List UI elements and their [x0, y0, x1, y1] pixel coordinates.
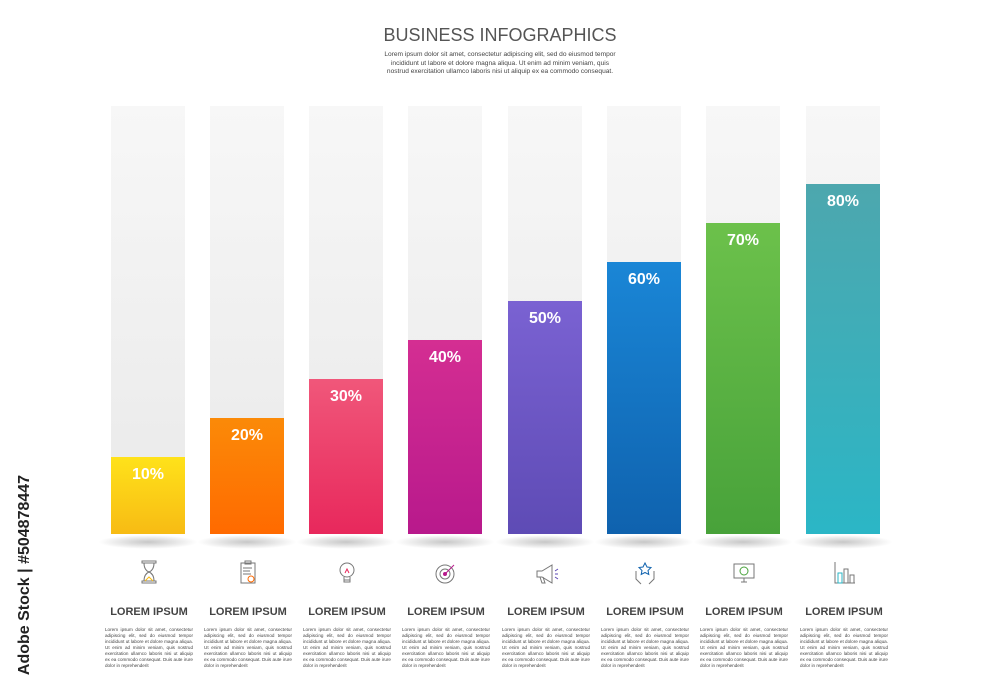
subtitle text: nostrud exercitation ullamco laboris nisi ut aliquip ex ea commodo consequat.	[387, 68, 613, 75]
bar 30%: 30%	[330, 388, 362, 405]
column 1	[105, 560, 193, 668]
column 4: Lorem ipsum dolor sit amet, consectetur adipiscing elit, sed do eiusmod tempor incididunt ut labore et dolore magna aliqua. Ut enim ad minim veniam, quis nostrud exercitation ullamco laboris nisi ut aliquip ex ea commodo consequat. Duis aute irure dolor in reprehenderit	[402, 627, 490, 668]
column 2: Lorem ipsum dolor sit amet, consectetur adipiscing elit, sed do eiusmod tempor incididunt ut labore et dolore magna aliqua. Ut enim ad minim veniam, quis nostrud exercitation ullamco laboris nisi ut aliquip ex ea commodo consequat. Duis aute irure dolor in reprehenderit	[204, 627, 292, 668]
icon: monitor with dollar	[734, 564, 754, 582]
column 4	[402, 564, 490, 668]
column 4: LOREM IPSUM	[407, 606, 485, 618]
column 5: Lorem ipsum dolor sit amet, consectetur adipiscing elit, sed do eiusmod tempor incididunt ut labore et dolore magna aliqua. Ut enim ad minim veniam, quis nostrud exercitation ullamco laboris nisi ut aliquip ex ea commodo consequat. Duis aute irure dolor in reprehenderit	[502, 627, 590, 668]
title: BUSINESS INFOGRAPHICS	[383, 25, 617, 45]
column 8	[800, 562, 888, 668]
bar 40%	[408, 106, 482, 534]
column 3	[303, 562, 391, 668]
icon: light bulb	[340, 562, 354, 582]
bar 40%: 40%	[429, 349, 461, 366]
column 8: Lorem ipsum dolor sit amet, consectetur adipiscing elit, sed do eiusmod tempor incididunt ut labore et dolore magna aliqua. Ut enim ad minim veniam, quis nostrud exercitation ullamco laboris nisi ut aliquip ex ea commodo consequat. Duis aute irure dolor in reprehenderit	[800, 627, 888, 668]
watermark side text: Adobe Stock | #504878447	[16, 475, 33, 675]
bar 30%	[309, 106, 383, 534]
bar 50%: 50%	[529, 310, 561, 327]
column 8: LOREM IPSUM	[805, 606, 883, 618]
icon: bar chart	[834, 562, 855, 584]
column 7	[700, 564, 788, 668]
column 3: LOREM IPSUM	[308, 606, 386, 618]
bar 20%: 20%	[231, 427, 263, 444]
bar 10%: 10%	[132, 466, 164, 483]
bar 60%: 60%	[628, 271, 660, 288]
subtitle text	[384, 51, 616, 75]
column 6: LOREM IPSUM	[606, 606, 684, 618]
column 2	[204, 560, 292, 668]
bar 20%	[210, 106, 284, 534]
column 3: Lorem ipsum dolor sit amet, consectetur adipiscing elit, sed do eiusmod tempor incididunt ut labore et dolore magna aliqua. Ut enim ad minim veniam, quis nostrud exercitation ullamco laboris nisi ut aliquip ex ea commodo consequat. Duis aute irure dolor in reprehenderit	[303, 627, 391, 668]
column 1: Lorem ipsum dolor sit amet, consectetur adipiscing elit, sed do eiusmod tempor incididunt ut labore et dolore magna aliqua. Ut enim ad minim veniam, quis nostrud exercitation ullamco laboris nisi ut aliquip ex ea commodo consequat. Duis aute irure dolor in reprehenderit	[105, 627, 193, 668]
bar 70%	[706, 106, 780, 534]
column 7: LOREM IPSUM	[705, 606, 783, 618]
bar 80%	[806, 106, 880, 534]
icon: hourglass	[142, 560, 156, 584]
subtitle text: Lorem ipsum dolor sit amet, consectetur adipiscing elit, sed do eiusmod tempor	[384, 51, 616, 58]
icon: megaphone	[536, 564, 558, 584]
column 5: LOREM IPSUM	[507, 606, 585, 618]
bar 50%	[508, 106, 582, 534]
column 6	[601, 562, 689, 668]
column 7: Lorem ipsum dolor sit amet, consectetur adipiscing elit, sed do eiusmod tempor incididunt ut labore et dolore magna aliqua. Ut enim ad minim veniam, quis nostrud exercitation ullamco laboris nisi ut aliquip ex ea commodo consequat. Duis aute irure dolor in reprehenderit	[700, 627, 788, 668]
bar 60%	[607, 106, 681, 534]
column 2: LOREM IPSUM	[209, 606, 287, 618]
icon: target	[436, 564, 454, 584]
bar 70%: 70%	[727, 232, 759, 249]
subtitle text: incididunt ut labore et dolore magna aliqua. Ut enim ad minim veniam, quis	[391, 60, 609, 66]
bar 80%: 80%	[827, 193, 859, 210]
icon: hands with star	[636, 562, 654, 584]
bar 10%	[111, 106, 185, 534]
column 5	[502, 564, 590, 668]
icon: clipboard	[240, 560, 256, 584]
column 6: Lorem ipsum dolor sit amet, consectetur adipiscing elit, sed do eiusmod tempor incididunt ut labore et dolore magna aliqua. Ut enim ad minim veniam, quis nostrud exercitation ullamco laboris nisi ut aliquip ex ea commodo consequat. Duis aute irure dolor in reprehenderit	[601, 627, 689, 668]
column 1: LOREM IPSUM	[110, 606, 188, 618]
